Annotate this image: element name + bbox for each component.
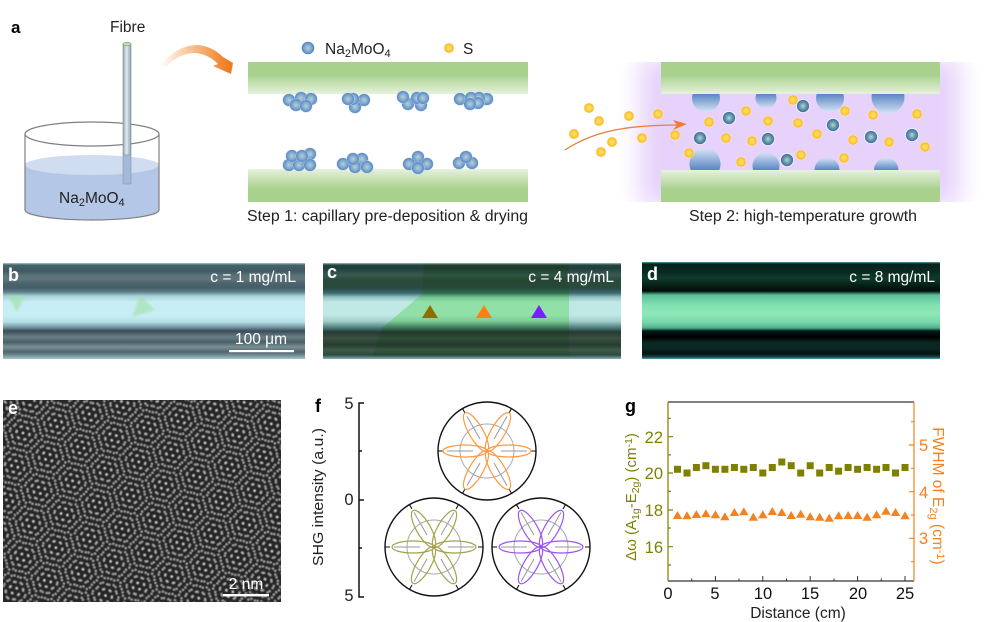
right axis: 4 [919,484,928,502]
concentration label d: c = 8 mg/mL [849,269,935,286]
SHG scale axis: 5 [344,587,354,605]
legend: Na2MoO4 and S: 2 [345,48,351,60]
label: Na2MoO4 in beaker: Na [59,190,79,207]
purple vapour glow [640,58,960,206]
marker triangles [422,305,547,318]
deposited clusters: top wall [283,91,493,113]
x axis tick labels: 20 [849,585,867,603]
left axis title: 2g [630,481,642,493]
SHG scale axis [344,395,364,605]
left axis: 20 [645,465,663,483]
arrow: beaker to step 1 [160,45,233,74]
right axis title: (cm [929,520,946,550]
series: FWHM triangles [673,507,910,522]
label: Na2MoO4 in beaker: 2 [79,197,85,209]
fibre wall: step 2 top [661,62,940,94]
label: Na2MoO4 in beaker: 4 [119,197,125,209]
concentration label c: c = 4 mg/mL [528,269,614,286]
fibre wall: step 2 bottom [661,170,940,202]
panel label f: f [315,396,322,416]
x axis title: Distance (cm) [750,605,846,622]
label: Fibre: Fibre [110,19,145,36]
panel label a: a [11,18,21,37]
legend: Na2MoO4 and S: S [463,41,473,58]
right axis: 5 [919,437,928,455]
panel label g: g [625,396,636,416]
polar plot: olive [385,498,483,596]
right axis title: -1 [934,550,946,560]
right axis title: 2g [927,507,939,520]
scale bar 2 nm [223,576,269,596]
left axis: 16 [645,539,663,557]
label: Na2MoO4 in beaker: MoO [85,190,119,207]
concentration label b: c = 1 mg/mL [210,269,296,286]
SHG scale axis: 5 [344,395,354,413]
green flake region [372,263,569,359]
growth domes: top [692,94,904,114]
scale bar 100 um: 100 μm [235,331,287,348]
panel label b: b [8,265,19,285]
panel: g, Raman chart along fibre [623,396,946,622]
legend: Na2MoO4 and S [302,41,473,60]
left axis title: ) [623,433,640,438]
Na2MoO4 vapour atoms [693,99,919,167]
scale bar 2 nm: 2 nm [229,576,263,593]
x axis tick labels: 15 [801,585,819,603]
icon: fibre [123,42,131,184]
left axis title: 1g [630,508,642,520]
panel: a, step 2 high-temperature growth [565,58,960,225]
deposited clusters: bottom wall [283,148,478,174]
chart frame: top and bottom axes [668,402,914,581]
left axis title: -E [623,493,640,508]
scale bar 100 um [229,331,294,352]
panel: b, micrograph at 1 mg/mL [3,263,305,359]
axis title SHG: SHG intensity (a.u.) [310,428,327,566]
caption: step 2: Step 2: high-temperature growth [689,208,917,225]
panel: a, fibre immersion and capillary pre-deposition [11,18,528,225]
SHG scale axis: 0 [344,491,354,509]
x axis tick labels [663,585,914,603]
x axis tick labels: 10 [754,585,772,603]
left axis title: Δω (A [623,520,640,561]
caption: step 1: Step 1: capillary pre-deposition & drying [247,208,528,225]
icon: beaker with solution [25,122,159,220]
growth domes: bottom [690,149,898,170]
left axis title: ) (cm [623,447,640,482]
panel label d: d [647,264,658,284]
polar plot: purple [492,498,590,596]
fibre wall: step 1 bottom [248,169,528,202]
legend: Na2MoO4 and S: 4 [385,48,391,60]
right axis [909,402,928,581]
left axis title: -1 [623,438,635,447]
left axis [645,402,673,581]
panel label e: e [8,398,18,418]
arrow: vapour flow [565,120,687,150]
panel: f, SHG polar plots [310,395,590,605]
fibre wall: step 1 top [248,62,528,94]
panel label c: c [327,262,337,282]
x axis tick labels: 0 [663,585,673,603]
x axis tick labels: 25 [896,585,914,603]
panel: c, micrograph at 4 mg/mL [323,262,621,359]
polar plot: orange [438,402,536,500]
panel: e, moire TEM image [3,398,281,602]
left axis: 22 [645,429,663,447]
green flake triangles [8,295,155,317]
x axis tick labels: 5 [710,585,720,603]
legend: Na2MoO4 and S: MoO [351,41,385,58]
right axis title: FWHM of E [929,427,946,507]
right axis title: ) [929,560,946,565]
left axis: 18 [645,502,663,520]
panel: d, micrograph at 8 mg/mL [642,262,940,359]
legend: Na2MoO4 and S: Na [325,41,345,58]
S vapour atoms [569,95,930,167]
series: delta omega squares [674,458,908,476]
right axis: 3 [919,530,928,548]
